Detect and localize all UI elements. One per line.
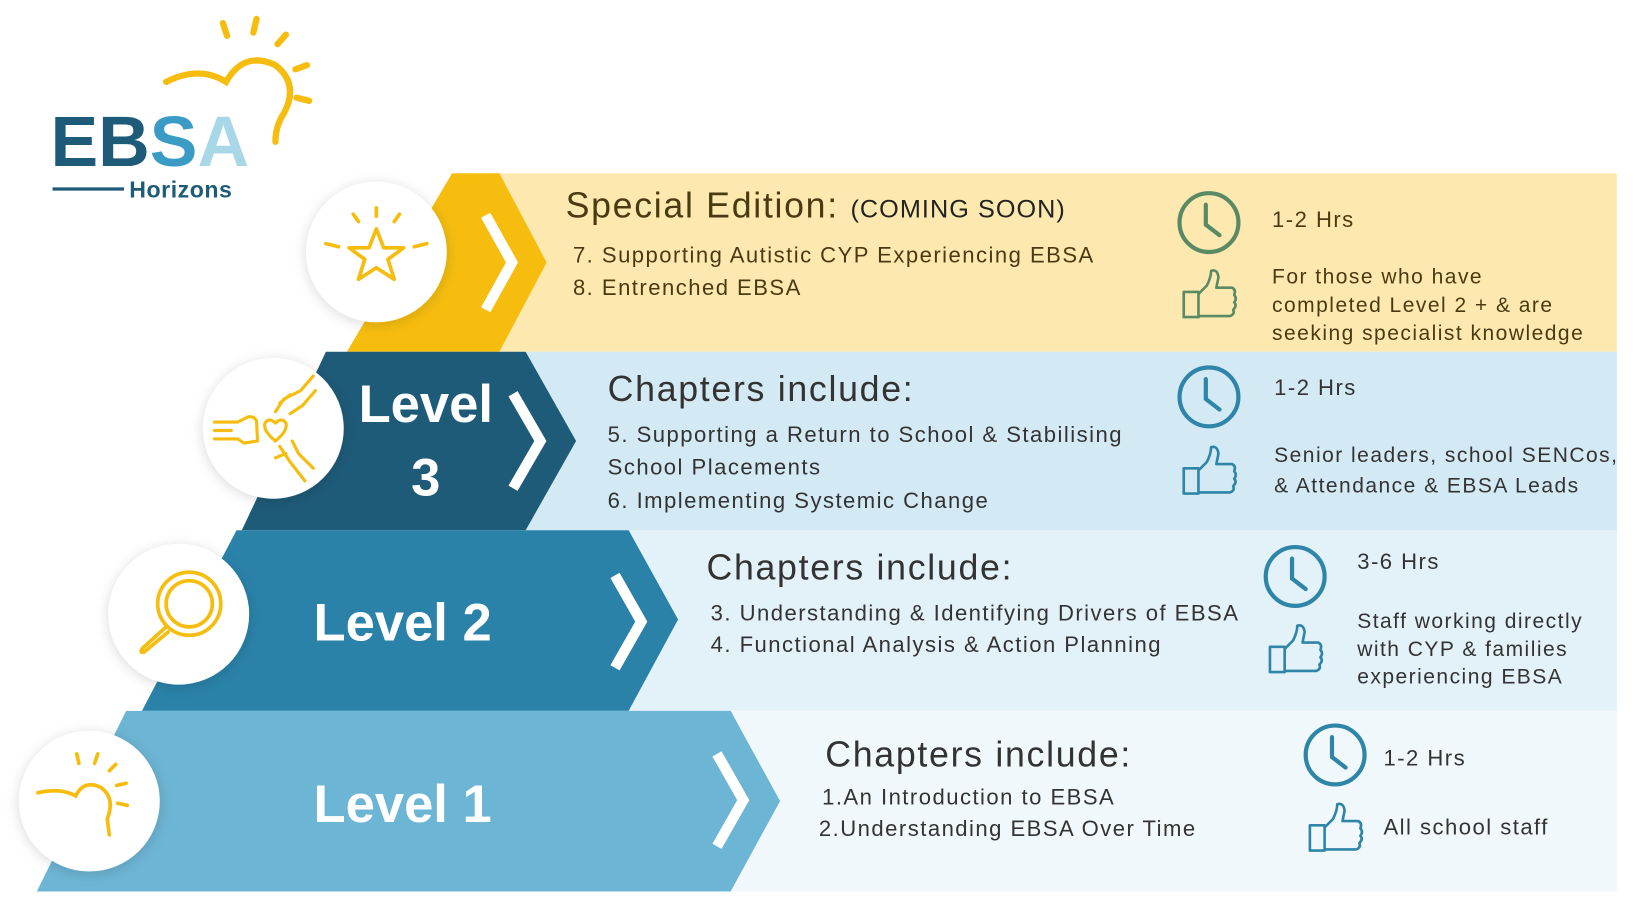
band: level 1: 1.An Introduction to EBSA [822, 784, 1115, 809]
band: level 2: 3-6 Hrs [1357, 549, 1440, 574]
band: level 3: Senior leaders, school SENCos, [1274, 444, 1618, 467]
band: level 1: 2.Understanding EBSA Over Time [819, 816, 1197, 841]
band: level 3: School Placements [608, 455, 822, 480]
band: level 3: & Attendance & EBSA Leads [1274, 474, 1580, 497]
band: special edition: 8. Entrenched EBSA [573, 275, 802, 300]
band: special edition: completed Level 2 + & are [1272, 294, 1554, 317]
band: special edition: seeking specialist knowledge [1272, 322, 1584, 345]
icon circle: magnifier [108, 544, 249, 685]
band: level 3: 1-2 Hrs [1274, 375, 1357, 400]
band: special edition: 7. Supporting Autistic CYP Experiencing EBSA [573, 243, 1095, 267]
band: level 2: Level 2 [314, 594, 492, 652]
band: special edition: Special Edition: (COMING SOON) [566, 185, 1066, 225]
icon circle: hands [203, 358, 344, 499]
band: level 1: 1-2 Hrs [1383, 745, 1466, 770]
band: level 2: 3. Understanding & Identifying Drivers of EBSA [711, 601, 1239, 626]
band: level 2: Staff working directly [1357, 610, 1583, 633]
band: special edition: For those who have [1272, 266, 1483, 288]
logo [50, 19, 309, 202]
band: level 1 [37, 711, 1617, 891]
logo: EBSA [50, 102, 249, 182]
icons: thumbs up [1184, 270, 1362, 851]
band: level 2: with CYP & families [1356, 638, 1568, 661]
band: level 1: All school staff [1383, 815, 1549, 840]
band: level 2: experiencing EBSA [1357, 666, 1563, 689]
band: level 3: 3 [411, 449, 440, 508]
band: level 2 [142, 530, 1617, 711]
band: level 2: 4. Functional Analysis & Action Planning [711, 632, 1162, 657]
band: level 1: Level 1 [314, 775, 492, 834]
icon circle: star [306, 182, 447, 322]
band: level 2: Chapters include: [706, 548, 1013, 588]
band: special edition [347, 173, 1617, 352]
band: level 3: Level [359, 375, 493, 434]
icons: clocks [1180, 193, 1365, 784]
band: level 3: Chapters include: [608, 369, 914, 409]
band: special edition: 1-2 Hrs [1272, 207, 1355, 232]
band: level 3: 6. Implementing Systemic Change [608, 488, 989, 513]
band: level 3: 5. Supporting a Return to School & Stabilising [608, 422, 1123, 447]
logo: Horizons [129, 176, 232, 202]
icon circle: sun [19, 731, 160, 872]
band: level 3 [242, 352, 1618, 530]
band: level 1: Chapters include: [825, 735, 1132, 774]
